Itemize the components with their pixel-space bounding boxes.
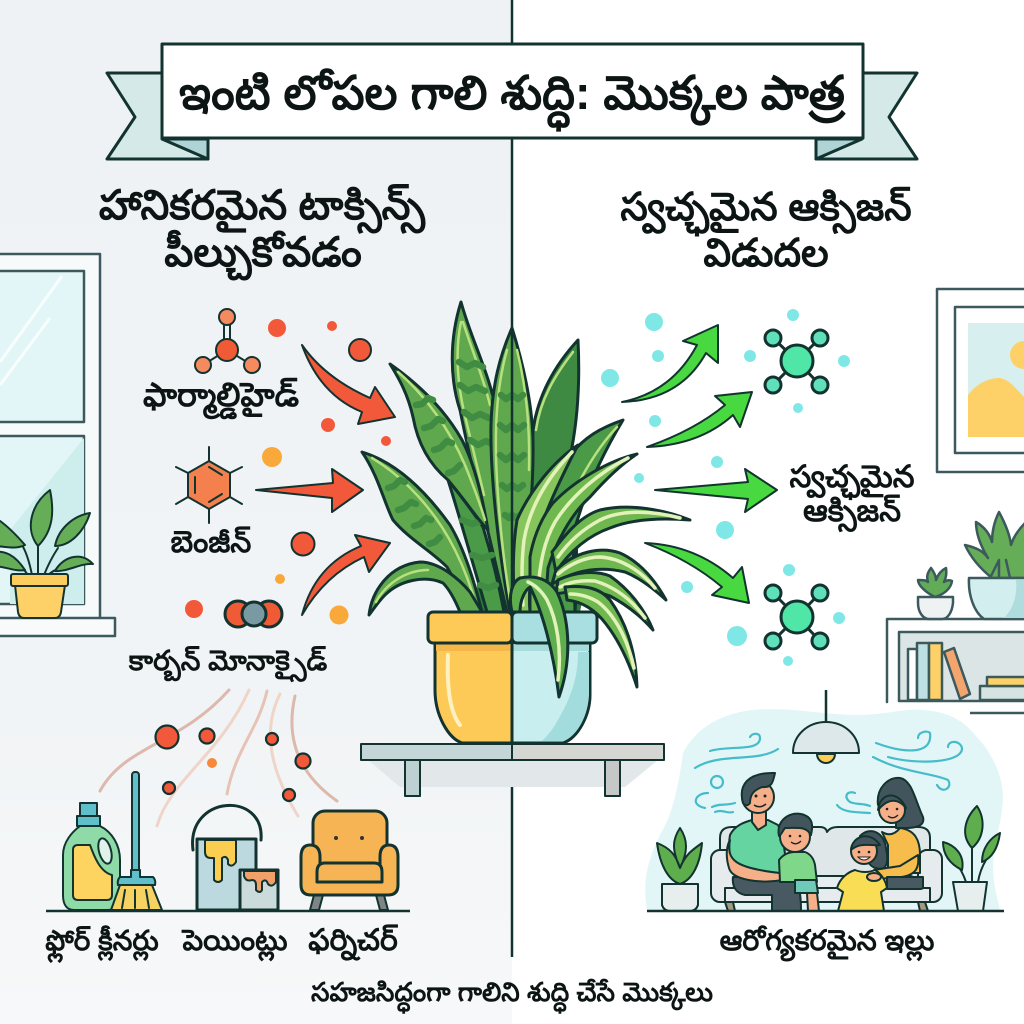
center divider (511, 0, 513, 957)
red arrow top (302, 345, 395, 424)
floor line left (46, 910, 410, 912)
toxin particles (185, 319, 391, 624)
icon: oxygen molecule bottom (765, 585, 828, 649)
spider plant leaves back (513, 420, 690, 612)
title plate (162, 44, 863, 138)
label: clean oxygen: ఆక్సిజన్ (803, 493, 901, 533)
icon: carbon monoxide (225, 601, 282, 627)
left heading: హానికరమైన టాక్సిన్స్ (99, 182, 426, 234)
potted plant right (943, 806, 1000, 911)
divider through plant (511, 328, 513, 612)
green arrow 1 (622, 325, 718, 402)
icon: formaldehyde molecule (195, 309, 260, 373)
snake plant leaves (362, 302, 590, 615)
right half background (512, 0, 1024, 1024)
left heading: పీల్చుకోవడం (164, 229, 362, 281)
pot (428, 612, 597, 744)
small shelf plant (918, 568, 953, 619)
title text: ఇంటి లోపల గాలి శుద్ధి: మొక్కల పాత్ర (179, 66, 846, 132)
right heading (620, 186, 912, 275)
window plant (0, 490, 93, 618)
sofa (711, 827, 942, 911)
green arrow 3 (655, 469, 777, 512)
icon: oxygen molecule top (765, 330, 828, 393)
ribbon left (107, 73, 208, 159)
spider plant leaves front (510, 550, 666, 697)
label: formaldehyde: ఫార్మాల్డిహైడ్ (143, 376, 300, 420)
icon: cleaner bottle and broom (63, 772, 162, 910)
source labels: పెయింట్లు (181, 925, 288, 962)
father (727, 773, 801, 911)
shelf with books and plants (887, 512, 1024, 713)
source labels: ఫర్నిచర్ (308, 924, 398, 961)
framed picture (937, 289, 1024, 472)
girl (837, 831, 887, 911)
title banner (107, 44, 917, 159)
label: clean oxygen: స్వచ్ఛమైన (790, 459, 915, 501)
right heading: విడుదల (703, 232, 829, 275)
shelf (361, 744, 664, 796)
boy (778, 814, 819, 911)
oxygen dots (601, 309, 850, 666)
floor line right (647, 910, 1004, 912)
green arrow 4 (645, 543, 749, 603)
left heading (99, 182, 426, 281)
plant (362, 302, 690, 744)
red arrow bottom (302, 535, 390, 615)
potted plant left (657, 828, 702, 911)
left half background (0, 0, 512, 1024)
right heading: స్వచ్ఛమైన ఆక్సిజన్ (620, 186, 912, 237)
label: healthy home: ఆరోగ్యకరమైన ఇల్లు (720, 925, 934, 962)
source labels (45, 924, 398, 964)
label: clean oxygen (790, 459, 915, 533)
label: carbon monoxide: కార్బన్ మోనాక్సైడ్ (128, 645, 327, 683)
source labels: ఫ్లోర్ క్లీనర్లు (45, 925, 159, 964)
icon: benzene (176, 447, 242, 523)
red arrow middle (256, 469, 363, 512)
green arrow 2 (647, 392, 752, 447)
air blob (645, 709, 1003, 910)
window (0, 254, 115, 636)
ribbon right (816, 73, 917, 159)
icon: paint cans (193, 805, 278, 910)
large shelf plant (965, 512, 1024, 619)
icon: armchair (301, 811, 398, 910)
pendant lamp (793, 690, 859, 763)
label: benzene: బెంజీన్ (171, 526, 251, 559)
mother (874, 778, 923, 889)
footer caption: సహజసిద్ధంగా గాలిని శుద్ధి చేసే మొక్కలు (311, 977, 713, 1014)
pollutant swirls (100, 690, 337, 826)
air swirls (695, 732, 962, 862)
healthy home scene (645, 690, 1004, 911)
